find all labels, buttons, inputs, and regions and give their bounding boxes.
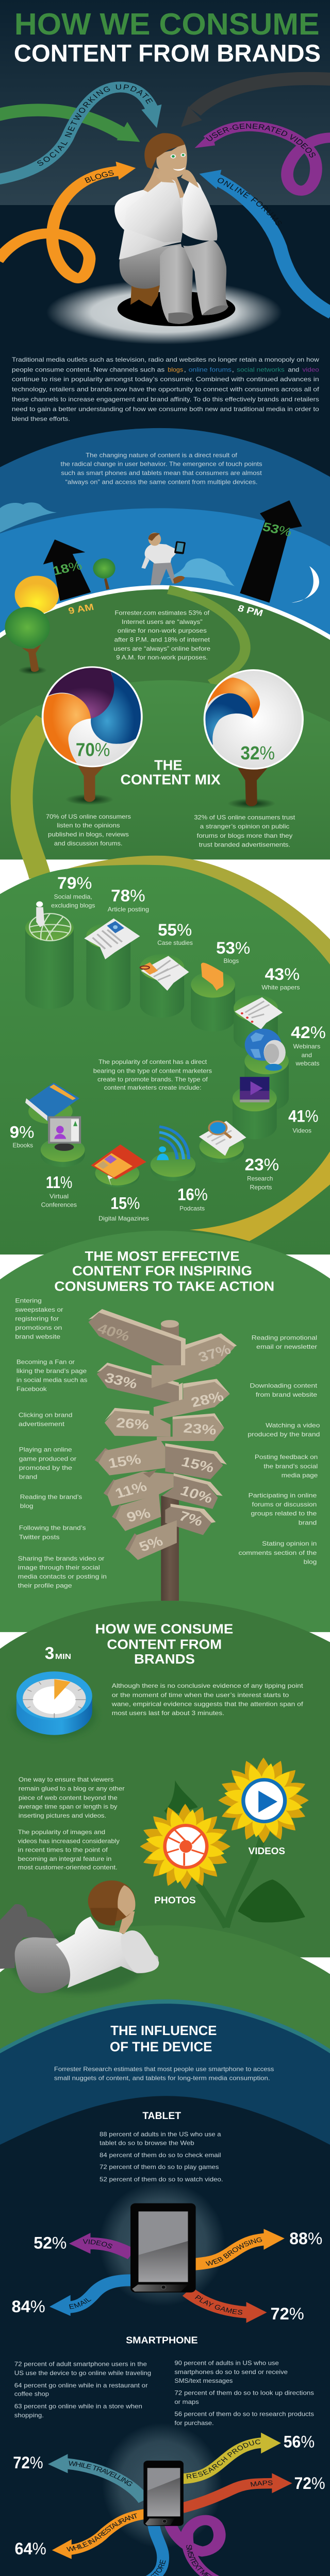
label: videos: VIDEOS — [249, 1846, 285, 1857]
text: smartphone facts right: SMS/text messages — [174, 2377, 233, 2384]
text: popularity of content: content marketers create include: — [104, 1084, 202, 1091]
cylinder and monitor: virtual conferences 11 percent — [41, 1116, 85, 1167]
panel: lower content types and signpost — [10, 1082, 319, 1375]
stat: 84 percent: 84% — [11, 2297, 45, 2316]
stat: 9 percent: 9% — [10, 1123, 35, 1142]
cylinder and document: white papers 43 percent — [234, 995, 283, 1051]
sign: 5 percent: 5% — [137, 1534, 166, 1555]
intro text: online forums — [189, 366, 232, 373]
left labels: sweepstakes and fan: Entering — [15, 1297, 42, 1304]
figure: thinking man — [114, 133, 228, 324]
stat: 9 percent: Ebooks — [12, 1142, 33, 1149]
text: forrester estimate: Internet users are “always” — [122, 618, 203, 625]
heading: the content mix — [120, 757, 221, 788]
right labels: media page — [282, 1472, 318, 1479]
stat: 23 percent: Reports — [250, 1184, 272, 1191]
stat: 52 percent: 52% — [34, 2233, 67, 2252]
arrow: email — [50, 2274, 131, 2316]
text: attention span: or the moment of time when the user’s interest starts to — [112, 1691, 289, 1699]
right labels: from brand website — [256, 1391, 317, 1398]
text: smartphone facts right: 72 percent of them do so to look up directions — [174, 2389, 314, 2396]
stat: 72 percent left: 72% — [13, 2453, 43, 2472]
text: keep viewers glued: average time span or length is by — [19, 1803, 118, 1810]
icon: timer — [12, 1671, 96, 1738]
stat: 42 percent — [291, 1023, 326, 1067]
stat: 55 percent: Case studies — [157, 939, 193, 946]
stat: 15 percent: 15% — [110, 1194, 140, 1213]
figure: lying man — [0, 1880, 159, 1993]
title — [14, 7, 321, 67]
sign: 37 percent: 37% — [196, 1342, 233, 1365]
text: forrester estimate: Forrester.com estimates 53% of — [114, 609, 209, 616]
left labels: advertisement — [19, 1420, 64, 1428]
left labels: sweepstakes and fan — [15, 1297, 75, 1365]
stat: 79 percent: Social media, — [54, 893, 92, 900]
right labels: email — [252, 1334, 318, 1350]
heading: most effective content: CONSUMERS TO TAKE ACTION — [54, 1279, 274, 1294]
stat: 53 percent: 53% — [216, 938, 250, 957]
left labels: promoted by the — [19, 1464, 72, 1471]
heading: influence of the device: OF THE DEVICE — [110, 2040, 212, 2055]
text: smartphone facts left — [14, 2361, 151, 2419]
arrow: user-generated videos: USER-GENERATED VIDEOS — [206, 124, 316, 158]
arrow: play games: PLAY GAMES — [195, 2295, 242, 2315]
heading: most effective content: CONTENT FOR INSPIRING — [72, 1264, 252, 1279]
sign: 28 percent — [154, 1379, 230, 1420]
stat: 55 percent — [157, 920, 193, 946]
text: 70 percent caption: and discussion forums. — [54, 840, 123, 847]
arrow: green — [0, 110, 140, 142]
intro text: blogs — [168, 366, 183, 373]
sign: 9 percent — [112, 1494, 161, 1531]
intro text: continue to rise in popularity amongst today’s consumer. Combined with continued advances in — [12, 376, 319, 383]
label: 8 PM: 8 PM — [236, 603, 265, 619]
arrow: 18 percent — [43, 539, 91, 601]
arrow: web browsing — [196, 2229, 285, 2270]
left labels: blog — [20, 1502, 33, 1510]
smartphone glow — [102, 2422, 222, 2548]
arrow: user-generated videos — [195, 121, 330, 196]
stat: 16 percent: Podcasts — [179, 1205, 205, 1212]
text: smartphone facts right: 56 percent of them do so to research products — [174, 2411, 314, 2417]
heading line: how we consume: HOW WE CONSUME — [95, 1622, 233, 1637]
sign: left 15 percent — [95, 1439, 165, 1476]
stat: 41 percent: Videos — [292, 1127, 311, 1134]
text: popularity of content: The popularity of content has a direct — [98, 1058, 207, 1065]
panel: smartphone chart — [13, 2427, 325, 2576]
arrow: videos — [69, 2233, 131, 2259]
stat: 15 percent — [98, 1194, 149, 1222]
text: forrester estimate: 9 A.M. for non-work purposes. — [116, 654, 208, 661]
text: attention span: most users last for about 3 minutes. — [112, 1709, 224, 1717]
cylinder and document: article posting 78 percent — [84, 919, 140, 1011]
intro text: The changing nature of content is a direct result of — [86, 452, 237, 459]
arrow: while travelling — [48, 2454, 143, 2503]
text: attention span: Although there is no conclusive evidence of any tipping point — [112, 1682, 303, 1689]
heading: tablet: TABLET — [142, 2110, 182, 2121]
intro text: the radical change in user behavior. The emergence of touch points — [61, 461, 262, 467]
intro text: such as smart phones and tablets mean that consumers are almost — [61, 469, 262, 477]
left labels: sweepstakes and fan: registering for — [15, 1315, 59, 1322]
sign: 26 percent: 26% — [116, 1416, 150, 1433]
cylinder and globe: social media 79 percent — [25, 902, 74, 1009]
text: attention span: wane, empirical evidence suggests that the attention span of — [111, 1701, 303, 1707]
intro text: “always on” and access the same content from multiple devices. — [65, 479, 258, 485]
right labels: Stating opinion in — [262, 1540, 317, 1547]
arrow: while in a restaurant — [52, 2509, 143, 2559]
sign: 28 percent: 28% — [189, 1389, 226, 1411]
left labels: game produced or — [19, 1455, 77, 1462]
sign: 11 percent: 11% — [113, 1479, 149, 1501]
sign: left 15 percent: 15% — [107, 1452, 142, 1471]
stat: 53 percent — [216, 938, 250, 964]
heading lines: content from brands: CONTENT FROM — [107, 1637, 222, 1652]
sign: 23 percent: 23% — [183, 1421, 217, 1438]
text: keep viewers glued: piece of web content beyond the — [19, 1794, 118, 1801]
intro text: , — [184, 366, 186, 373]
stat: 79 percent — [51, 873, 95, 909]
text: keep viewers glued: videos has increased considerably — [18, 1838, 120, 1844]
stat: 53 percent: Blogs — [223, 957, 239, 964]
stat: 43 percent: White papers — [261, 984, 300, 991]
sign: upper right lower edge — [152, 1365, 217, 1388]
right labels: Posting feedback on — [255, 1453, 318, 1461]
stat: 55 percent: 55% — [158, 920, 192, 939]
left labels: media contacts or posting in — [18, 1573, 107, 1580]
intro text: blend these efforts. — [12, 415, 70, 422]
left labels: sweepstakes and fan: brand website — [15, 1333, 60, 1340]
text: tablet facts — [100, 2131, 223, 2183]
cylinder and video: videos 41 percent — [233, 1077, 277, 1139]
stat: 42 percent: and — [301, 1052, 312, 1059]
cylinder and book: ebooks 9 percent — [25, 1082, 79, 1124]
sign: right 15 percent: 15% — [179, 1454, 216, 1476]
stat: 78 percent — [108, 886, 149, 913]
sign: 7 percent: 7% — [177, 1509, 205, 1529]
icon: moon — [291, 566, 319, 603]
stat: 11 percent: 11% — [46, 1173, 72, 1192]
text: 70 percent caption: published in blogs, reviews — [48, 831, 129, 838]
text: smartphone facts left: 72 percent of adult smartphone users in the — [14, 2361, 147, 2367]
text: tablet facts: 84 percent of them do so to check email — [100, 2151, 221, 2159]
heading lines: content from brands — [107, 1637, 222, 1667]
text: forrester research — [54, 2065, 274, 2081]
cylinder and magnifier: research reports 23 percent — [199, 1121, 246, 1163]
right labels: brand — [299, 1519, 317, 1526]
text: keep viewers glued: most customer-oriented content. — [18, 1864, 118, 1871]
text: keep viewers glued: becoming an integral feature in — [18, 1855, 111, 1862]
panel: signpost — [16, 1363, 320, 1637]
panel: tablet chart — [11, 2185, 322, 2427]
right labels — [238, 1382, 320, 1565]
text: 32 percent caption: a stranger’s opinion on public — [200, 823, 289, 830]
text: tablet facts: 88 percent of adults in the US who use a — [100, 2131, 221, 2138]
left labels: Reading the brand’s — [20, 1494, 82, 1500]
left labels: in social media such as — [16, 1377, 88, 1383]
text: keep viewers glued — [18, 1776, 125, 1871]
left labels: Sharing the brands video or — [18, 1555, 105, 1562]
text: keep viewers glued: remain glued to a blog or any other — [19, 1785, 125, 1792]
text: forrester estimate: online for non-work purposes — [118, 627, 207, 634]
heading: influence of the device — [110, 2023, 217, 2055]
label: photos: PHOTOS — [154, 1895, 196, 1906]
arrow: maps — [184, 2473, 292, 2513]
plant stems and leaves — [164, 1780, 305, 1927]
heading lines: content from brands: BRANDS — [134, 1652, 195, 1667]
sign: 40 percent — [88, 1309, 186, 1375]
arrow: 53 percent: 53% — [261, 519, 294, 539]
tablet glow — [99, 2181, 225, 2307]
arrow: sms text messages — [164, 2515, 226, 2576]
right labels: the brand’s social — [263, 1463, 318, 1469]
heading: the content mix: THE — [154, 757, 182, 773]
text: smartphone facts left: coffee shop — [14, 2391, 49, 2397]
heading: most effective content — [54, 1249, 274, 1294]
text: popularity of content: bearing on the type of content marketers — [93, 1067, 212, 1074]
heading: influence of the device: THE INFLUENCE — [110, 2023, 217, 2038]
stat: 16 percent — [177, 1185, 208, 1212]
text: forrester research: Forrester Research estimates that most people use smartphone to access — [54, 2065, 274, 2073]
sign: 5 percent — [125, 1520, 177, 1560]
stat: 23 percent: 23% — [245, 1155, 279, 1174]
stat: 41 percent: 41% — [288, 1107, 319, 1126]
arrow: maps: MAPS — [251, 2480, 273, 2487]
arrow: blogs: BLOGS — [85, 170, 114, 183]
cylinder and document: case studies 55 percent — [140, 954, 189, 1018]
stat: 43 percent: 43% — [265, 964, 300, 984]
right labels: comments section of the — [238, 1549, 317, 1556]
left labels: Clicking on brand — [19, 1412, 72, 1418]
right labels: produced by the brand — [248, 1431, 320, 1438]
left labels: Facebook — [16, 1385, 47, 1393]
arrow: dark grey — [181, 78, 330, 127]
right labels: email: Reading promotional — [252, 1334, 317, 1341]
text: tablet facts: 52 percent of them do so to watch video. — [100, 2176, 223, 2183]
arrow: online forums: ONLINE FORUMS — [218, 178, 282, 226]
icon: small tree — [93, 558, 116, 590]
stat: 79 percent: excluding blogs — [51, 902, 95, 909]
panel: attention span and media — [12, 1637, 309, 1927]
cylinder and bubble: blogs 53 percent — [191, 963, 235, 1031]
arrow: blogs — [0, 162, 136, 283]
arrow: email: EMAIL — [69, 2298, 92, 2309]
icon: cloud — [166, 558, 235, 586]
arrow: research products — [184, 2433, 281, 2484]
arrow: while in a restaurant: WHILE IN A RESTAURANT — [66, 2513, 137, 2551]
sign: 23 percent — [157, 1413, 224, 1441]
sign: 33 percent: 33% — [103, 1370, 139, 1392]
text: forrester estimate — [113, 609, 210, 661]
text: smartphone facts left: shopping. — [14, 2412, 44, 2419]
arrow: 53 percent — [240, 500, 302, 603]
intro text: video — [303, 366, 319, 373]
stat: 88 percent: 88% — [289, 2229, 322, 2248]
intro text: people consume content. New channels such as — [12, 366, 164, 373]
left labels: their profile page — [18, 1582, 72, 1589]
sign: right 15 percent — [165, 1443, 227, 1479]
text: smartphone facts right: 90 percent of adults in US who use — [174, 2360, 279, 2366]
text: 32 percent caption: 32% of US online consumers trust — [194, 814, 295, 821]
panel: always online scene — [5, 500, 319, 848]
stat: 23 percent — [245, 1155, 279, 1191]
intro text: and — [288, 366, 299, 373]
arrow: play games — [183, 2290, 267, 2323]
text: 32 percent caption — [194, 814, 295, 848]
text: smartphone facts left: US use the device to go online while traveling — [14, 2369, 151, 2377]
icon: videos flower — [218, 1758, 309, 1843]
icon: tablet — [130, 2204, 196, 2293]
sign: 11 percent — [104, 1470, 174, 1506]
stat: 23 percent: Research — [247, 1175, 273, 1182]
text: keep viewers glued: One way to ensure that viewers — [19, 1776, 114, 1783]
left labels: sweepstakes and fan: sweepstakes or — [15, 1306, 63, 1313]
sign: 7 percent — [165, 1504, 216, 1535]
stat: 42 percent: 42% — [291, 1023, 326, 1042]
left labels: Following the brand’s — [19, 1524, 86, 1531]
right labels: Participating in online — [249, 1492, 317, 1499]
stat: 56 percent: 56% — [284, 2432, 315, 2451]
stat: 72 percent right: 72% — [294, 2473, 325, 2493]
text: popularity of content — [93, 1058, 212, 1091]
stat: 42 percent: webcats — [295, 1060, 320, 1067]
arrow: social networking updates — [0, 81, 162, 184]
left labels: sweepstakes and fan: Becoming a Fan or — [16, 1358, 75, 1365]
stat: 3 minutes: 3 — [45, 1643, 54, 1663]
panel: hero — [0, 7, 330, 344]
text: 32 percent caption: forums or blogs more than they — [197, 832, 293, 839]
label: 9 AM: 9 AM — [67, 602, 95, 616]
text: forrester estimate: users are “always” online before — [113, 645, 210, 652]
intro text — [12, 356, 319, 485]
text: keep viewers glued: The popularity of images and — [18, 1828, 105, 1836]
text: keep viewers glued: inserting pictures and videos. — [19, 1812, 106, 1819]
sign: 37 percent — [185, 1333, 237, 1375]
text: smartphone facts right — [174, 2360, 314, 2427]
text: attention span — [111, 1682, 303, 1717]
sign: 40 percent: 40% — [95, 1321, 132, 1344]
stat: 11 percent — [41, 1173, 77, 1208]
post cap — [161, 1320, 179, 1341]
left labels: sweepstakes and fan: promotions on — [15, 1324, 62, 1331]
stat: 11 percent: Conferences — [41, 1201, 77, 1208]
heading: the content mix: CONTENT MIX — [120, 771, 221, 788]
chart: 32 percent tree — [204, 669, 305, 809]
text: forrester estimate: after 8 P.M. and 18% of internet — [114, 636, 210, 643]
right labels: Watching a video — [266, 1422, 320, 1429]
right labels: groups related to the — [251, 1510, 317, 1517]
sign: 10 percent — [162, 1473, 223, 1509]
stat: 3 minutes — [45, 1643, 71, 1663]
text: 70 percent caption: 70% of US online consumers — [46, 813, 131, 820]
text: tablet facts: tablet do so to browse the Web — [100, 2139, 194, 2146]
stat: 72 percent: 72% — [270, 2304, 304, 2323]
chart: 70 percent tree — [42, 666, 145, 805]
right labels: forums or discussion — [252, 1501, 317, 1508]
sign: 33 percent — [97, 1363, 183, 1404]
stat: 11 percent: Virtual — [50, 1193, 69, 1200]
text: smartphone facts right: or maps — [174, 2398, 199, 2405]
cylinder and globe: webinars 42 percent — [244, 1029, 289, 1111]
arrow: web browsing: WEB BROWSING — [205, 2238, 262, 2266]
arrow: while in a store — [145, 2526, 169, 2576]
cylinder and signal: podcasts 16 percent — [151, 1127, 196, 1181]
panel: device section — [0, 1880, 274, 2183]
icon: photos flower — [140, 1804, 230, 1889]
arrow: online forums — [199, 170, 330, 318]
sign: 10 percent: 10% — [178, 1483, 215, 1506]
text: popularity of content: create to promote brands. The type of — [97, 1076, 208, 1083]
sign: 9 percent: 9% — [125, 1506, 153, 1526]
arrow: research products: RESEARCH PRODUCTS — [187, 2439, 261, 2479]
text: forrester research: small nuggets of content, and tablets for long-term media consumption. — [54, 2075, 270, 2081]
text: tablet facts: 72 percent of them do so to play games — [100, 2163, 219, 2171]
arrow: videos: VIDEOS — [82, 2239, 112, 2248]
stat: 9 percent — [10, 1123, 35, 1149]
spotlight — [46, 280, 282, 345]
text: 32 percent caption: trust branded advertisements. — [199, 841, 290, 848]
figure: walking man with phone — [141, 533, 186, 585]
stat: 41 percent — [288, 1107, 319, 1134]
right labels: blog — [304, 1558, 317, 1565]
right labels: Downloading content — [250, 1382, 317, 1389]
right labels: email: email or newsletter — [256, 1343, 318, 1350]
stat: 42 percent: Webinars — [293, 1043, 320, 1050]
signpost pole — [161, 1496, 179, 1601]
sign: 26 percent — [105, 1408, 171, 1437]
left labels: Twitter posts — [19, 1534, 60, 1540]
heading: most effective content: THE MOST EFFECTIVE — [85, 1249, 239, 1264]
intro text: social networks — [237, 366, 285, 373]
stat: 16 percent: 16% — [177, 1185, 208, 1204]
stat: 3 minutes: MIN — [55, 1652, 71, 1660]
stat: 15 percent: Digital Magazines — [98, 1215, 149, 1222]
stat: 78 percent: Article posting — [108, 906, 149, 913]
heading: smartphone: SMARTPHONE — [126, 2335, 198, 2346]
panel: content types — [25, 873, 326, 1139]
text: smartphone facts left: 64 percent go online while in a restaurant or — [14, 2382, 148, 2388]
stat: 64 percent: 64% — [15, 2539, 46, 2558]
left labels: brand — [19, 1473, 37, 1480]
text: keep viewers glued: in recent times to the point of — [18, 1846, 108, 1853]
stat: 78 percent: 78% — [111, 886, 145, 905]
left labels: image through their social — [18, 1564, 100, 1571]
stat: 43 percent — [261, 964, 300, 991]
icon: smartphone — [143, 2461, 184, 2526]
text: smartphone facts left: 63 percent go online while in a store when — [14, 2403, 142, 2410]
text: 70 percent caption: listen to the opinions — [57, 822, 120, 829]
arrow: 18 percent: 18% — [51, 558, 84, 578]
text: smartphone facts right: smartphones do so to send or receive — [174, 2368, 288, 2376]
text: smartphone facts right: for purchase. — [174, 2419, 214, 2427]
left labels — [16, 1367, 107, 1589]
cylinder and magazine: digital magazines 15 percent — [91, 1144, 146, 1187]
left labels: Playing an online — [19, 1446, 72, 1453]
stat: 79 percent: 79% — [57, 873, 92, 892]
icon: big tree — [5, 607, 50, 674]
chart: 32 percent tree: 32% — [241, 743, 275, 764]
chart: 70 percent tree: 70% — [76, 740, 110, 760]
arrow: while travelling: WHILE TRAVELLING — [69, 2461, 133, 2486]
icon: sun — [15, 575, 59, 614]
intro text: , — [232, 366, 234, 373]
text: 70 percent caption — [46, 813, 131, 847]
left labels: liking the brand’s page — [16, 1367, 87, 1375]
